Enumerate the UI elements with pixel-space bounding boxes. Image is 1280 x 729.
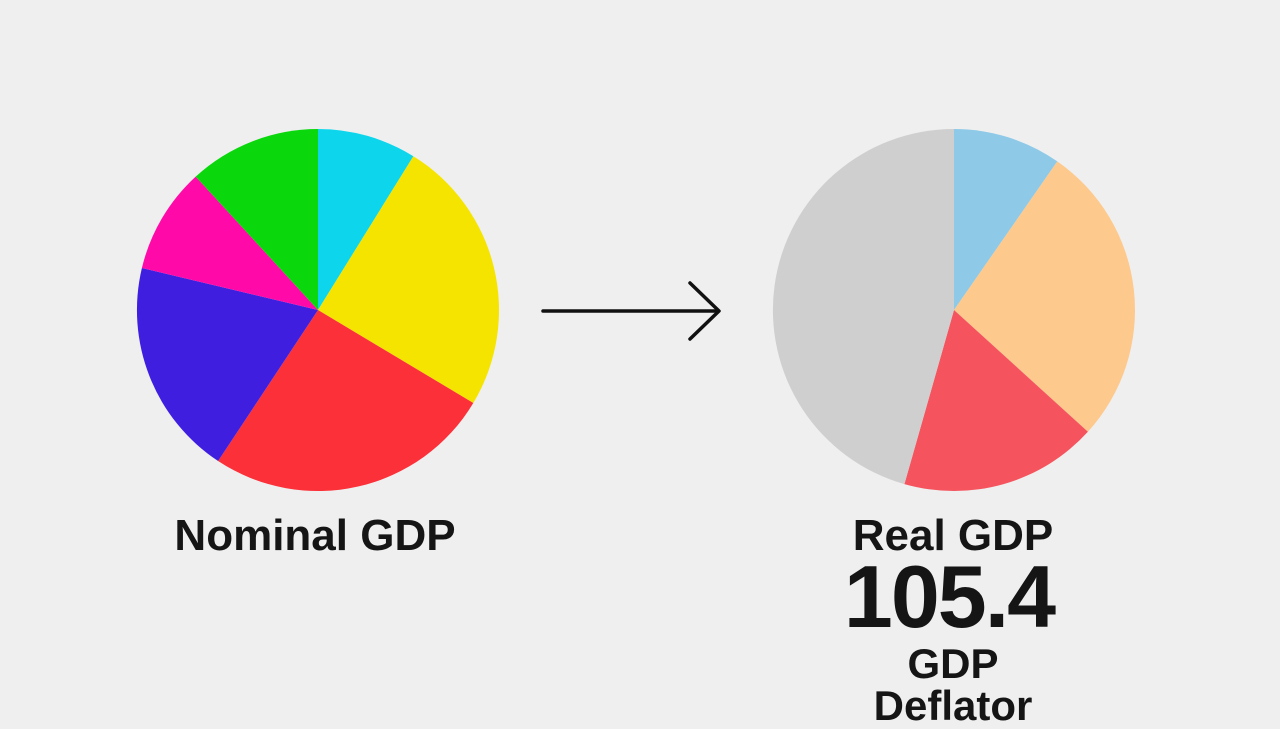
label: GDP Deflator: GDP <box>907 640 998 687</box>
label: GDP Deflator: Deflator <box>874 682 1032 729</box>
label: Real GDP: Real GDP <box>853 511 1053 560</box>
pie chart: nominal GDP <box>137 129 499 491</box>
arrow <box>543 283 719 339</box>
label: Nominal GDP: Nominal GDP <box>174 511 456 560</box>
value: 105.4: 105.4 <box>844 547 1054 646</box>
pie chart: real GDP <box>773 129 1135 491</box>
label: GDP Deflator <box>874 640 1032 729</box>
